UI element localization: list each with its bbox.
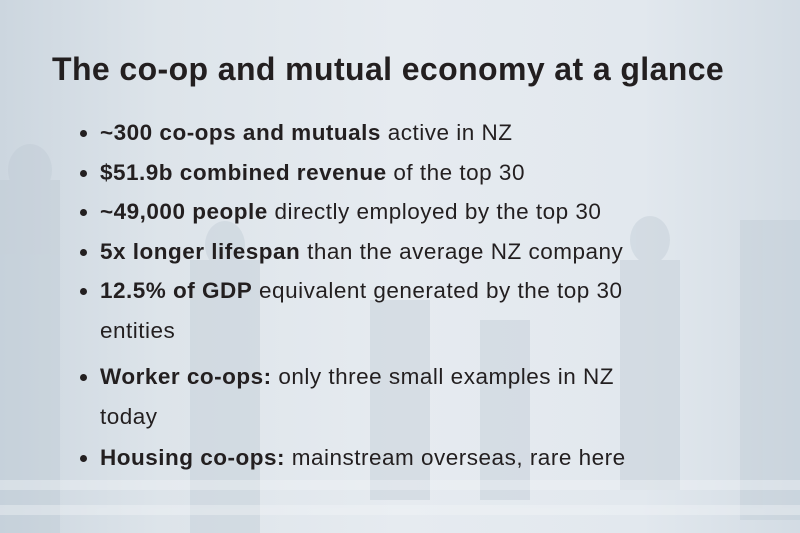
bullet list: key facts: entities: [100, 318, 175, 342]
bullet list: key facts: Worker co-ops: only three small examples in NZ: [100, 364, 614, 389]
title: The co-op and mutual economy at a glance: [52, 51, 724, 87]
bullet list: key facts: $51.9b combined revenue of the top 30: [100, 160, 525, 184]
bullet list: key facts: ~300 co-ops and mutuals active in NZ: [100, 120, 512, 145]
bullet list: key facts: 12.5% of GDP equivalent generated by the top 30: [100, 278, 623, 303]
bullet list: key facts: today: [100, 404, 158, 428]
bullet list: key facts: 5x longer lifespan than the average NZ company: [100, 238, 623, 264]
bullet list: key facts: [80, 120, 626, 470]
bullet list: key facts: ~49,000 people directly employed by the top 30: [100, 199, 601, 224]
bullet list: key facts: Housing co-ops: mainstream overseas, rare here: [100, 445, 626, 470]
